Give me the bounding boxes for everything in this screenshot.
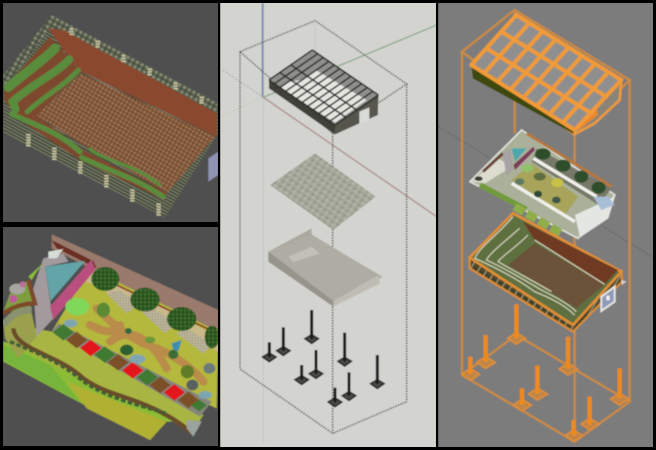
- left flower beds: [3, 262, 45, 325]
- building walls: [3, 15, 218, 217]
- panel: terrain model top-left: [3, 3, 218, 222]
- trees: [535, 148, 606, 194]
- blue door: [208, 152, 218, 182]
- building rim: [3, 15, 217, 115]
- panel: highlighted exploded view: [438, 3, 653, 447]
- pale corner stones: [187, 420, 202, 437]
- panel: SketchUp exploded view: [220, 3, 436, 447]
- greenhouse body: [269, 50, 378, 134]
- planted field: [37, 73, 215, 193]
- bright green shrub: [65, 298, 89, 315]
- brown strip: [523, 222, 618, 284]
- garden slab: [470, 130, 615, 238]
- orange bounding box: [462, 10, 630, 442]
- panel: garden model bottom-left: [3, 227, 218, 446]
- orange paths: [90, 308, 203, 382]
- grey entrance paving: [33, 253, 68, 337]
- panel background: [0, 0, 220, 225]
- green terraces: [8, 48, 163, 197]
- right white blobs: [575, 197, 615, 237]
- ground walls: [470, 258, 622, 332]
- back bed band: [532, 148, 612, 205]
- tile row: [53, 324, 207, 411]
- curved brown garden wall: [13, 328, 192, 433]
- dark plant left: [475, 176, 483, 181]
- faint axis lines: [438, 127, 655, 258]
- tile row base: [52, 323, 212, 417]
- tan strip behind beds: [83, 270, 218, 352]
- panel background: [438, 0, 655, 450]
- gravel beds: [107, 290, 213, 353]
- small plants and water: [64, 319, 215, 399]
- back wall trim: [527, 133, 612, 187]
- white paths: [512, 158, 597, 222]
- edge planting: [10, 342, 167, 413]
- left white terrace: [472, 158, 512, 183]
- roof gable: [575, 80, 621, 134]
- trees: [91, 267, 219, 348]
- field: [508, 243, 605, 308]
- orange column footings: [462, 304, 629, 442]
- panel background: [0, 225, 220, 450]
- pink wall: [513, 147, 535, 170]
- roof ribs: [269, 50, 378, 125]
- garden layer highlighted: [470, 130, 615, 238]
- planted spots: [515, 164, 563, 203]
- lime ground strip: [3, 342, 180, 440]
- side detail: [621, 280, 626, 285]
- glass roof panels: [269, 50, 378, 125]
- roof layer greenhouse: [269, 50, 378, 134]
- terrace contours: [475, 217, 605, 315]
- back wall: [52, 234, 218, 335]
- yellow-green band between tiles and curved wall: [17, 325, 203, 433]
- central planted area: [512, 163, 578, 215]
- panel background: [220, 0, 437, 450]
- green lawn strips: [480, 185, 526, 209]
- roof glazing: [471, 15, 621, 130]
- dotted bounding box: [240, 21, 407, 433]
- axes: [220, 3, 437, 443]
- roof olive fascia: [471, 65, 575, 135]
- red seam: [113, 283, 213, 332]
- mesh garden layer faded: [270, 153, 376, 230]
- roof layer: [471, 15, 621, 135]
- ground layer highlighted: [470, 213, 626, 332]
- gable wall: [335, 97, 378, 134]
- garden floor: [52, 268, 218, 408]
- teal glass triangle: [45, 261, 85, 301]
- column footings: [263, 310, 384, 407]
- pink flowering wall: [50, 259, 95, 320]
- brown top strip: [48, 28, 217, 137]
- ground layer block faded: [268, 228, 382, 307]
- roof ribs: [471, 15, 621, 130]
- wall pillars: [28, 28, 202, 217]
- door: [601, 287, 615, 311]
- terrace base: [4, 37, 167, 200]
- top surface: [470, 213, 621, 325]
- paved entrance: [503, 148, 513, 177]
- teal triangle: [512, 148, 527, 162]
